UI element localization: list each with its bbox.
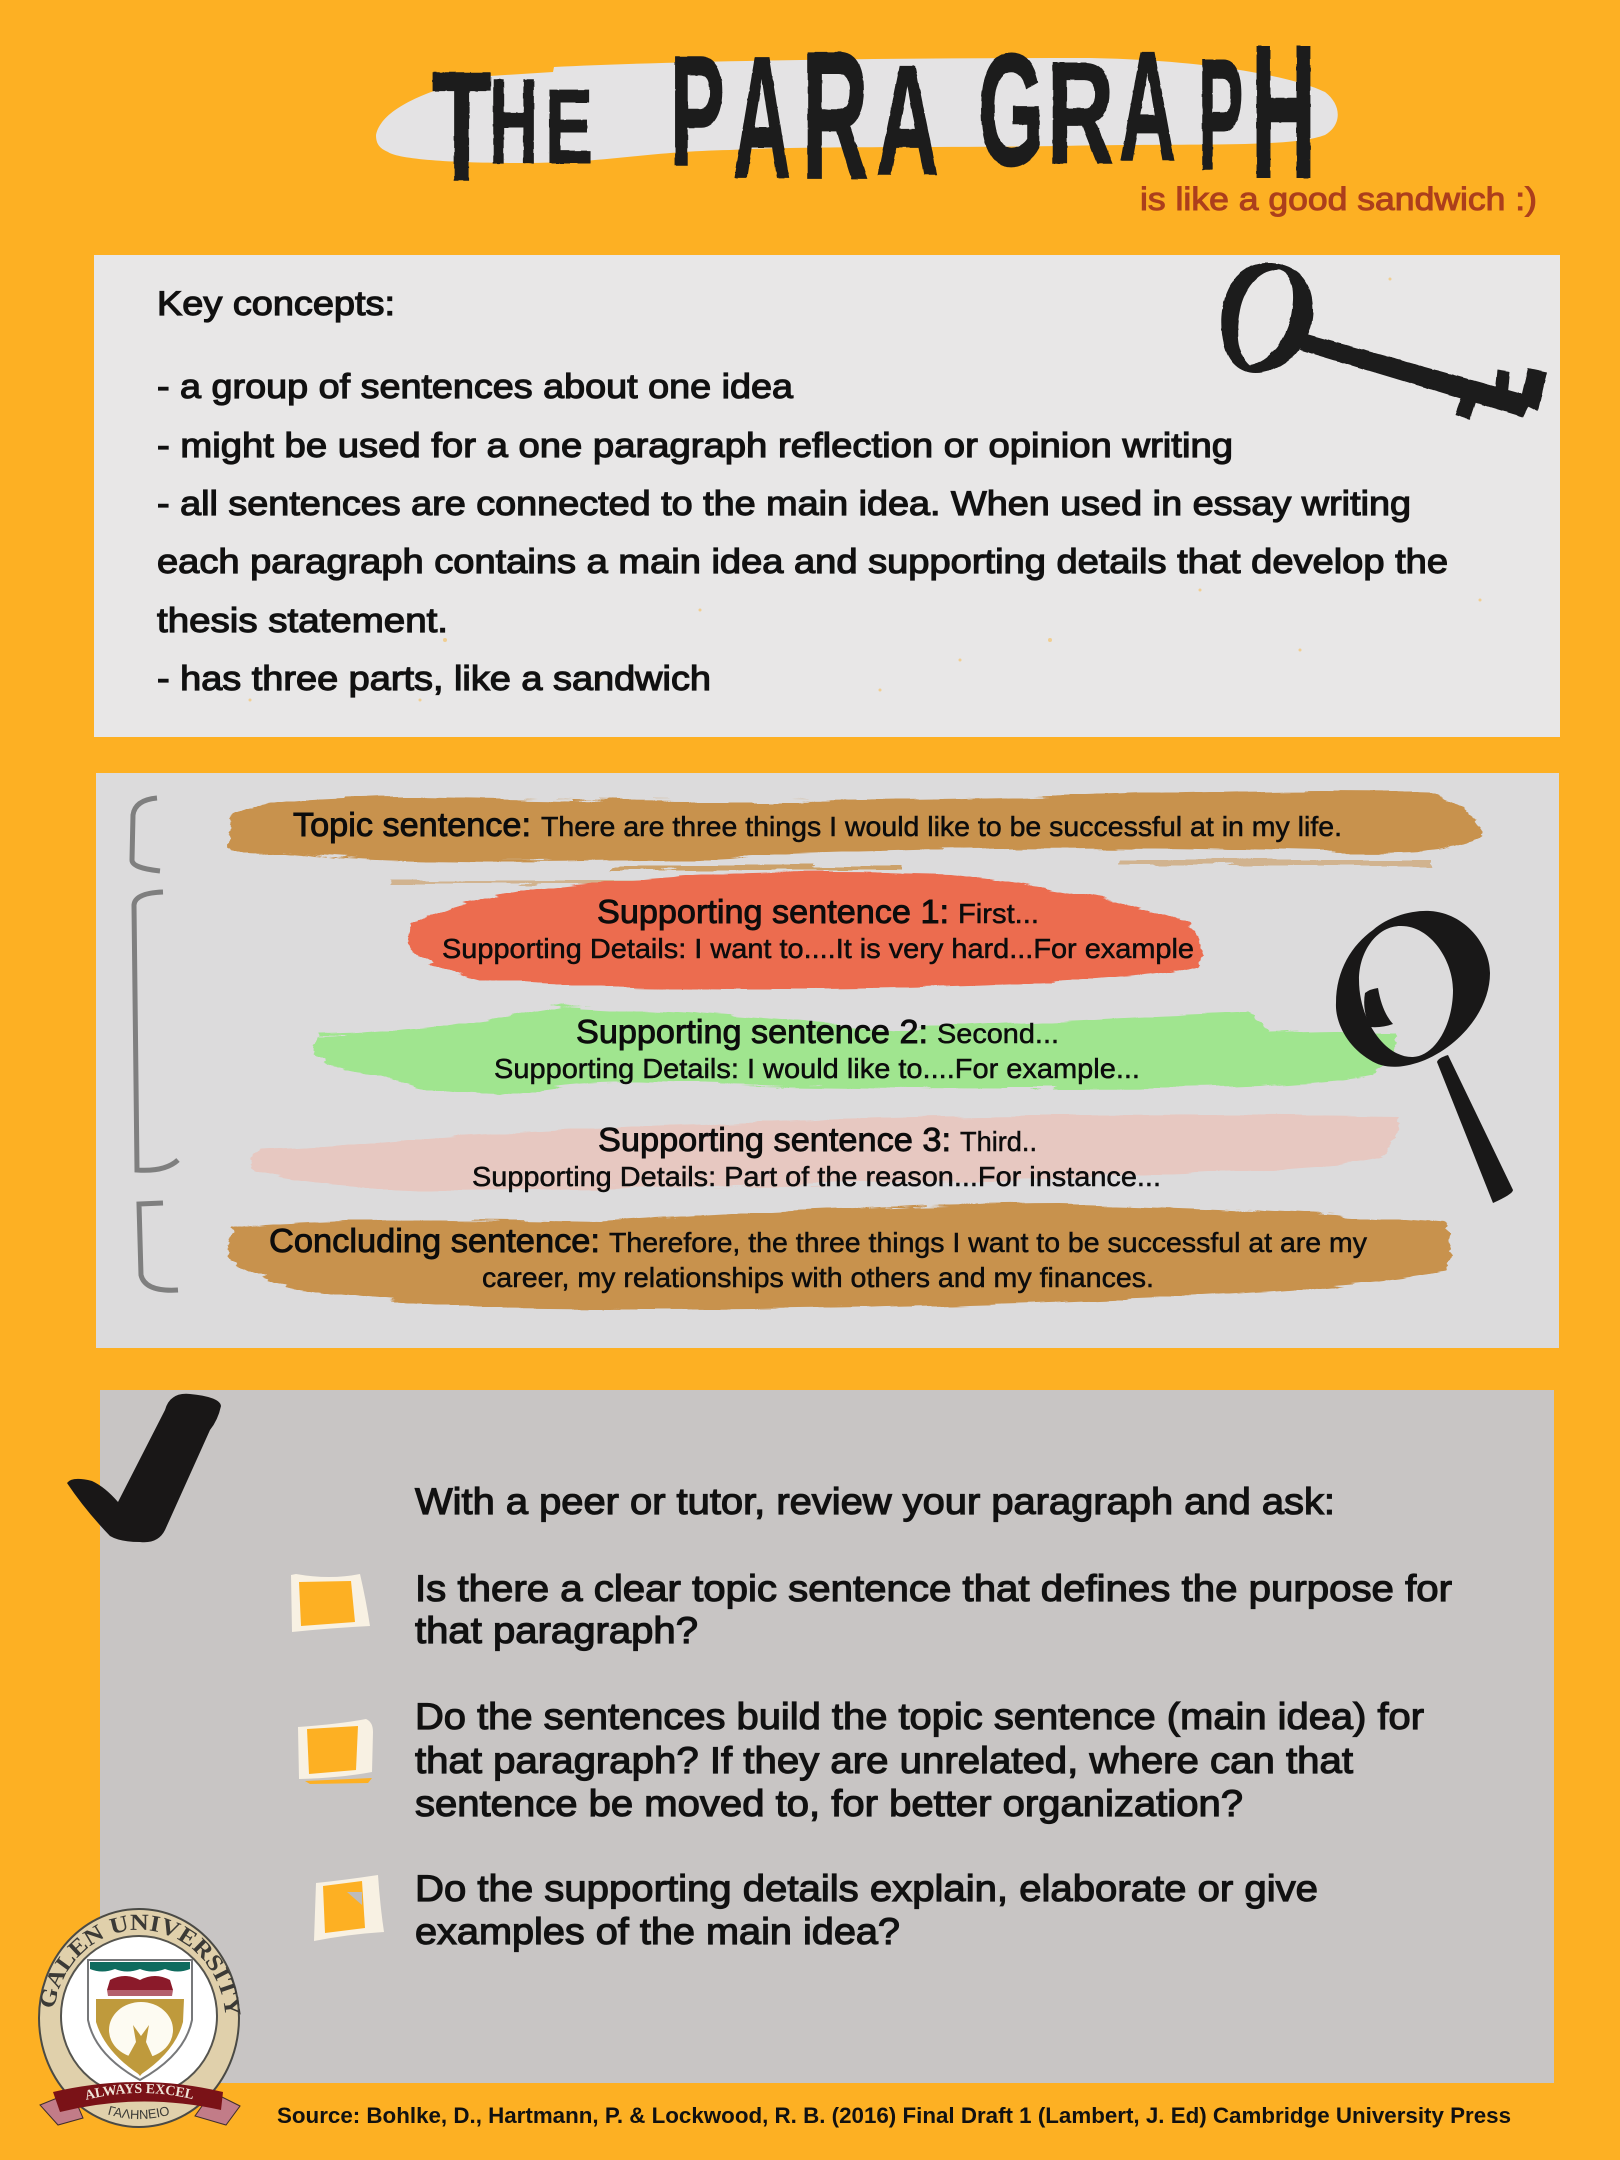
source citation: Source: Bohlke, D., Hartmann, P. & Lockwood, R. B. (2016) Final Draft 1 (Lambert, J. Ed) Cambridge University Press [277, 2103, 1511, 2128]
brush stroke: green [312, 1006, 1397, 1096]
title lettering: R [1047, 32, 1114, 194]
title lettering: H [1251, 7, 1316, 218]
title lettering: E [545, 68, 593, 186]
item 3 text: Do the supporting details explain, elaborate or give [415, 1868, 1318, 1909]
bracket: topic [132, 798, 160, 871]
seal ring [39, 1909, 239, 2127]
checklist item 2: that paragraph? If they are unrelated, where can that [415, 1740, 1354, 1781]
icon: magnifying glass [1336, 911, 1513, 1203]
shield [88, 1960, 192, 2080]
supporting sentence 2 strip: Second... [937, 1018, 1059, 1049]
supporting sentence 3 text: Supporting sentence 3: [598, 1121, 951, 1158]
checklist item 2 [298, 1696, 1424, 1824]
supporting sentence 2 strip [312, 1006, 1397, 1096]
title lettering: P [1198, 26, 1243, 203]
concluding sentence strip: career, my relationships with others and my finances. [482, 1262, 1154, 1293]
checklist item 3: examples of the main idea? [415, 1911, 900, 1952]
checkbox 1 [291, 1574, 370, 1632]
motto banner: ALWAYS EXCEL [86, 2084, 193, 2100]
concept list: thesis statement. [157, 602, 448, 640]
supporting sentence 1 strip: First... [958, 898, 1039, 929]
seal name: GALEN UNIVERSITY [41, 1914, 241, 2014]
supporting sentence 3 strip [251, 1116, 1399, 1192]
concept list: - might be used for a one paragraph reflection or opinion writing [157, 427, 1233, 465]
brush stroke: red [408, 872, 1202, 989]
concluding sentence strip: Therefore, the three things I want to be successful at are my [609, 1227, 1367, 1258]
checklist item 3 [314, 1868, 1318, 1952]
brush stroke: topic [228, 791, 1480, 884]
supporting sentence 1 strip: Supporting Details: I want to....It is very hard...For example [442, 933, 1194, 964]
item 1 text: Is there a clear topic sentence that defines the purpose for [415, 1568, 1452, 1609]
checklist item 2: sentence be moved to, for better organization? [415, 1783, 1243, 1824]
icon: key [1221, 263, 1547, 420]
panel: key concepts [94, 255, 1560, 737]
concept list [157, 368, 1448, 698]
panel: paragraph sandwich [96, 773, 1559, 1348]
concept list: each paragraph contains a main idea and supporting details that develop the [157, 543, 1448, 581]
concept list: - all sentences are connected to the main idea. When used in essay writing [157, 485, 1411, 523]
checklist prompt: With a peer or tutor, review your paragraph and ask: [415, 1481, 1335, 1522]
title backdrop blob [376, 58, 1338, 163]
logo: Galen University seal [38, 1908, 241, 2128]
paper speckles [248, 278, 1482, 702]
motto banner: ΓΑΛΗΝΕΙΟ [108, 2106, 169, 2120]
panel: peer review checklist [100, 1390, 1554, 2083]
brush stroke: concluding [227, 1204, 1450, 1309]
title lettering: A [1119, 20, 1176, 194]
title lettering: H [489, 53, 538, 189]
title lettering: A [876, 33, 939, 207]
supporting sentence 2 strip: Supporting Details: I would like to....For example... [494, 1053, 1140, 1084]
supporting sentence 1 text: Supporting sentence 1: [597, 893, 949, 930]
title lettering: G [978, 21, 1044, 200]
title [376, 7, 1338, 218]
concept list: - a group of sentences about one idea [157, 368, 793, 406]
supporting sentence 1 strip [408, 872, 1202, 989]
topic sentence strip [228, 791, 1480, 884]
checkbox 3 [314, 1875, 384, 1941]
supporting sentence 3 strip: Third.. [960, 1126, 1037, 1157]
brush stroke: pink [251, 1116, 1399, 1190]
motto banner [39, 2082, 241, 2126]
checkbox 2 [298, 1719, 373, 1784]
topic text: Topic sentence: [293, 806, 531, 843]
title lettering [432, 7, 1316, 218]
topic sentence strip: There are three things I would like to be successful at in my life. [541, 811, 1342, 842]
title lettering: T [432, 41, 491, 214]
title lettering: R [802, 13, 868, 217]
item 2 text: Do the sentences build the topic sentence (main idea) for [415, 1696, 1424, 1737]
icon: check mark [67, 1394, 221, 1542]
supporting sentence 2 text: Supporting sentence 2: [576, 1013, 928, 1050]
supporting sentence 3 strip: Supporting Details: Part of the reason...For instance... [472, 1161, 1161, 1192]
title lettering: P [670, 23, 725, 199]
heading: key concepts: Key concepts: [157, 285, 395, 323]
concluding sentence strip [227, 1204, 1450, 1309]
bracket: concluding [139, 1203, 178, 1290]
title lettering: A [733, 20, 791, 214]
bracket: supporting [134, 892, 178, 1170]
checklist item 1: that paragraph? [415, 1610, 698, 1651]
concept list: - has three parts, like a sandwich [157, 660, 711, 698]
checklist item 1 [291, 1568, 1452, 1651]
concluding text: Concluding sentence: [269, 1222, 600, 1259]
subtitle: is like a good sandwich :) [1140, 181, 1537, 217]
